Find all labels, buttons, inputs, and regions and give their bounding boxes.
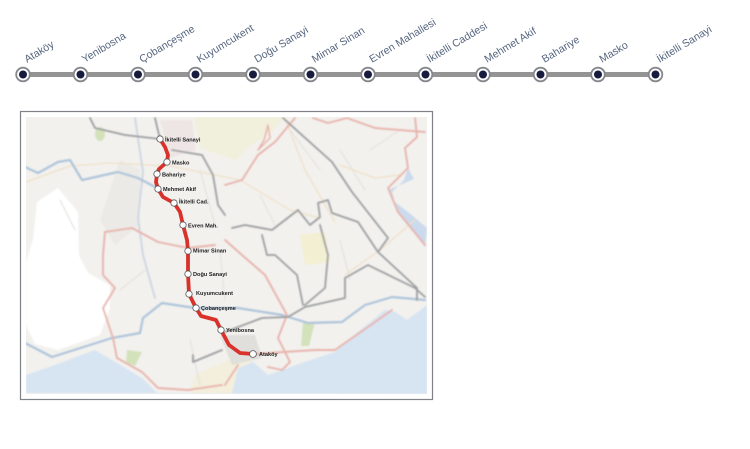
map station: Masko: Masko	[172, 160, 190, 166]
white reservoir area	[26, 188, 110, 350]
grey motorways	[90, 118, 425, 362]
station: Ataköy	[16, 38, 57, 81]
map station: Mehmet Akif: Mehmet Akif	[163, 187, 196, 193]
station: Mimar Sinan	[304, 25, 367, 81]
timeline track	[23, 72, 656, 77]
station: Mehmet Akif: Mehmet Akif	[482, 25, 539, 66]
base map	[25, 117, 427, 394]
map station: İkitelli Cad.: İkitelli Cad.	[179, 198, 209, 206]
map station: İkitelli Sanayi: İkitelli Sanayi	[165, 136, 201, 144]
map station: İkitelli Cad.	[171, 198, 209, 206]
station: Çobançeşme: Çobançeşme	[137, 23, 197, 66]
station: Kuyumcukent	[189, 22, 256, 81]
map station: Çobançeşme	[193, 305, 236, 312]
station: Ataköy: Ataköy	[22, 38, 57, 66]
map station: Ataköy	[250, 351, 279, 358]
map station: Ataköy: Ataköy	[259, 352, 279, 358]
station: Bahariye	[534, 34, 582, 81]
station: Doğu Sanayi: Doğu Sanayi	[252, 24, 311, 66]
map station: Çobançeşme: Çobançeşme	[201, 306, 236, 312]
map station: İkitelli Sanayi	[157, 136, 201, 144]
light blue road	[135, 118, 155, 298]
map station: Mehmet Akif	[155, 186, 196, 193]
map station: Evren Mah.	[180, 222, 218, 230]
map station: Mimar Sinan: Mimar Sinan	[193, 248, 227, 254]
station: Masko: Masko	[597, 39, 630, 66]
sea	[26, 305, 427, 394]
map station: Doğu Sanayi	[185, 271, 227, 278]
station: Doğu Sanayi	[246, 24, 311, 81]
station: Bahariye: Bahariye	[540, 34, 582, 66]
map station: Evren Mah.: Evren Mah.	[188, 224, 218, 230]
station: Kuyumcukent: Kuyumcukent	[195, 22, 256, 66]
station: Evren Mahallesi: Evren Mahallesi	[367, 16, 438, 66]
bay	[388, 168, 427, 247]
map station: Bahariye	[154, 171, 186, 178]
station: Çobançeşme	[131, 23, 197, 81]
station timeline	[16, 16, 714, 81]
map frame	[20, 112, 432, 400]
station: İkitelli Sanayi: İkitelli Sanayi	[654, 23, 714, 66]
station: İkitelli Caddesi	[419, 19, 490, 81]
station: Mimar Sinan: Mimar Sinan	[310, 25, 367, 66]
blue river	[25, 160, 157, 188]
station: Yenibosna	[74, 30, 128, 81]
map station: Yenibosna	[218, 327, 255, 334]
map station: Kuyumcukent: Kuyumcukent	[196, 291, 233, 297]
station: İkitelli Caddesi: İkitelli Caddesi	[424, 19, 490, 66]
map panel	[20, 112, 432, 400]
map station: Bahariye: Bahariye	[162, 172, 186, 178]
minor roads	[60, 130, 400, 385]
station: İkitelli Sanayi	[649, 23, 714, 81]
land tints	[95, 117, 330, 393]
map station: Yenibosna: Yenibosna	[226, 328, 255, 334]
map station: Doğu Sanayi: Doğu Sanayi	[193, 272, 227, 278]
map station markers and labels	[154, 136, 279, 358]
station: Masko	[591, 39, 630, 81]
station: Evren Mahallesi	[361, 16, 438, 81]
metro line	[156, 139, 253, 354]
map station: Masko	[164, 159, 190, 166]
station: Mehmet Akif	[476, 25, 539, 81]
red-pink roads	[103, 118, 425, 390]
station: Yenibosna: Yenibosna	[80, 30, 128, 66]
